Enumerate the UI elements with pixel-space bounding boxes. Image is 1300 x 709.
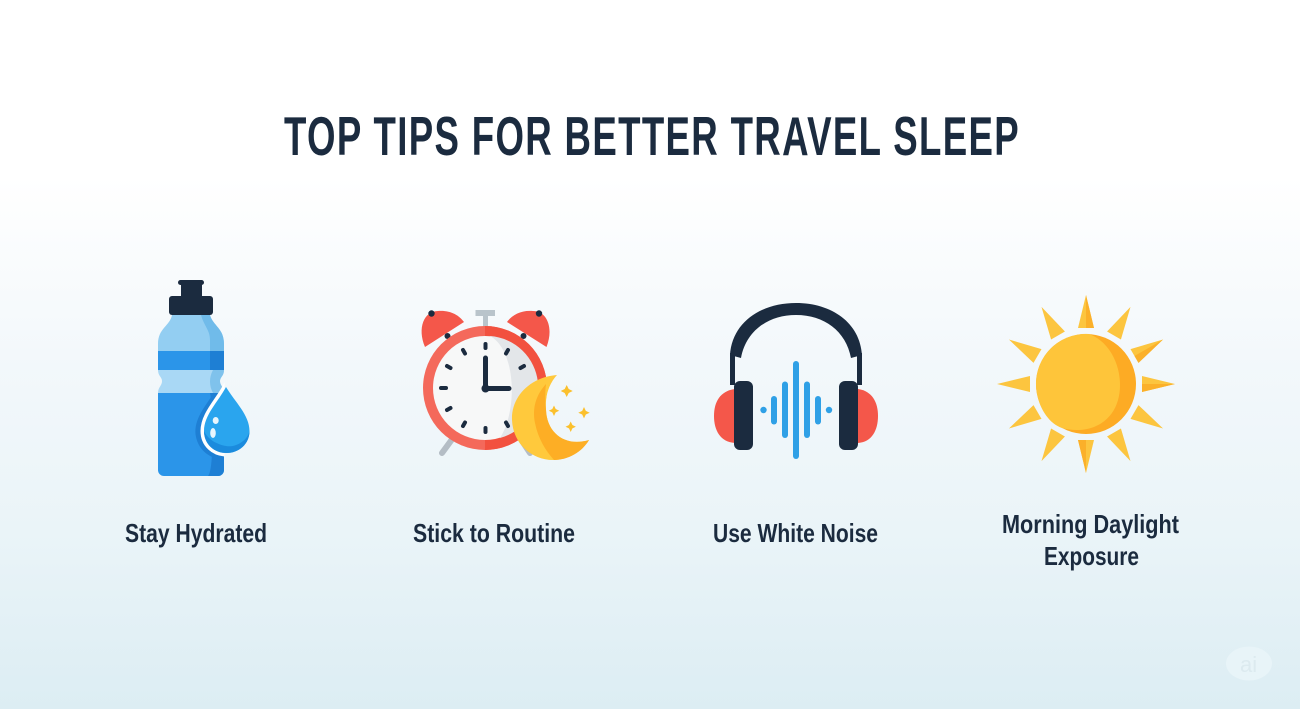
label: morning daylight exposure: [1002, 509, 1179, 571]
label: morning daylight exposure: Morning Daylight: [1002, 509, 1179, 539]
watermark badge: [1226, 646, 1272, 680]
label: morning daylight exposure: Exposure: [1044, 541, 1139, 571]
icon: water bottle: [158, 280, 250, 476]
label: stick to routine: Stick to Routine: [413, 518, 575, 548]
icon: headphones with sound wave: [714, 303, 878, 459]
watermark badge: ai: [1240, 652, 1257, 677]
icon: water drop: [204, 387, 250, 453]
sound wave: [760, 361, 832, 459]
label: use white noise: Use White Noise: [713, 518, 878, 548]
label: stay hydrated: Stay Hydrated: [125, 518, 267, 548]
icon: crescent moon: [512, 375, 590, 460]
icon: alarm clock with moon: [422, 310, 590, 460]
icon: sun: [997, 295, 1175, 473]
